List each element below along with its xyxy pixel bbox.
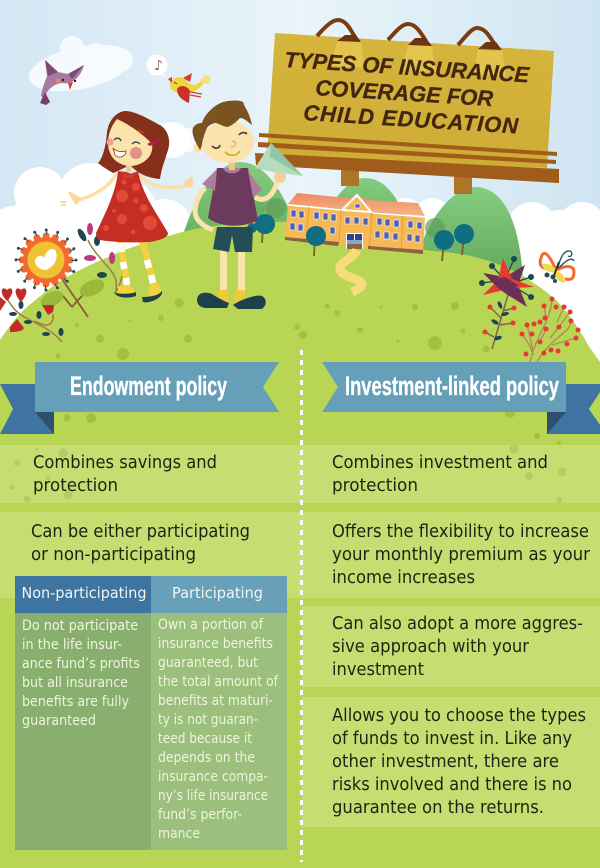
left text: combines savings: protection [33,476,118,496]
boy legs [224,250,242,293]
right text: funds: guarantee on the returns. [332,798,544,818]
right text: flexibility: income increases [332,568,475,588]
winding path [340,250,362,292]
right ribbon: Investment-linked policy [322,362,600,434]
girl arms [78,173,187,200]
girl face [108,119,152,166]
girl neck [126,163,131,172]
left text: combines savings [33,453,217,496]
girl hair [98,111,169,179]
girl legs [120,240,156,292]
boy [192,100,286,309]
boy shoes [197,293,266,309]
non-participating text: in the life insur- [22,637,122,653]
participating text: ny’s life insurance [158,788,268,804]
right text: funds: risks involved and there is no [332,775,572,795]
left text: participating: or non-participating [31,545,196,565]
background hills [182,162,523,280]
boy arms [195,180,278,230]
billboard title: TYPES OF INSURANCE [284,47,531,87]
left text: combines savings: Combines savings and [33,453,217,473]
participating text: Own a portion of [158,617,264,633]
trees [247,214,474,261]
butterfly [540,251,574,284]
billboard posts [341,170,472,194]
sky background [0,0,600,360]
music bubble: ♪ [154,58,163,74]
row backgrounds [0,445,600,827]
left text: participating: Can be either participating [31,522,250,542]
center dotted divider [300,350,303,862]
left text: participating [31,522,250,565]
right text: flexibility [332,522,591,588]
billboard stripes [255,133,559,183]
girl [60,111,194,302]
right text: funds [332,706,586,818]
boy shorts [213,227,253,252]
right text: flexibility: your monthly premium as your [332,545,591,565]
right text: funds: other investment, there are [332,752,559,772]
girl dress [96,171,168,242]
right text: combines investment: protection [332,476,418,496]
yellow bird [168,73,211,103]
participating text: teed because it [158,731,252,747]
school building [285,193,425,254]
non-participating text: benefits are fully [22,694,129,710]
berry bush [520,296,580,362]
table headers: Participating [172,584,263,602]
right text: funds: of funds to invest in. Like any [332,729,572,749]
non-participating text: guaranteed [22,713,96,729]
participating text: depends on the [158,750,255,766]
billboard title: CHILD EDUCATION [303,100,520,139]
boy head [229,160,235,170]
row dots [10,444,566,503]
green hill [0,222,600,868]
left ribbon title: Endowment policy [70,371,227,401]
participating text: insurance compa- [158,769,268,785]
purple bird [40,60,84,105]
participating text: fund’s perfor- [158,807,242,823]
participating text [158,617,279,842]
heart branch [0,288,64,342]
left ribbon: Endowment policy [0,362,279,434]
billboard lamps [317,20,502,50]
table headers [22,584,263,602]
right text: combines investment: Combines investment and [332,453,548,473]
non-participating text: ance fund’s profits [22,656,140,672]
billboard panel [267,33,554,168]
sun flower plant [16,230,107,317]
participating text: insurance benefits [158,636,273,652]
non-participating text: Do not participate [22,618,138,634]
non-participating text [22,618,140,729]
comparison table [15,576,287,850]
participating text: the total amount of [158,674,279,690]
right text: aggressive: sive approach with your [332,637,530,657]
right text: aggressive: investment [332,660,424,680]
table headers: Non-participating [22,584,146,602]
billboard [255,20,559,194]
right text: combines investment [332,453,548,496]
participating text: guaranteed, but [158,655,258,671]
non-participating text: but all insurance [22,675,128,691]
participating text: benefits at maturi- [158,693,273,709]
billboard title: COVERAGE FOR [315,75,494,111]
paper plane [255,143,303,176]
lamp glow [331,41,506,76]
star flower [479,256,534,349]
boy shirt [208,168,258,226]
music bubble [146,54,168,78]
billboard title [284,47,531,139]
participating text: mance [158,826,200,842]
hill dots [56,298,561,445]
right text: funds: Allows you to choose the types [332,706,586,726]
participating text: ty is not guaran- [158,712,258,728]
right text: aggressive [332,614,583,680]
purple leaf plant [76,223,122,292]
right text: aggressive: Can also adopt a more aggres- [332,614,583,634]
clouds [0,36,600,365]
